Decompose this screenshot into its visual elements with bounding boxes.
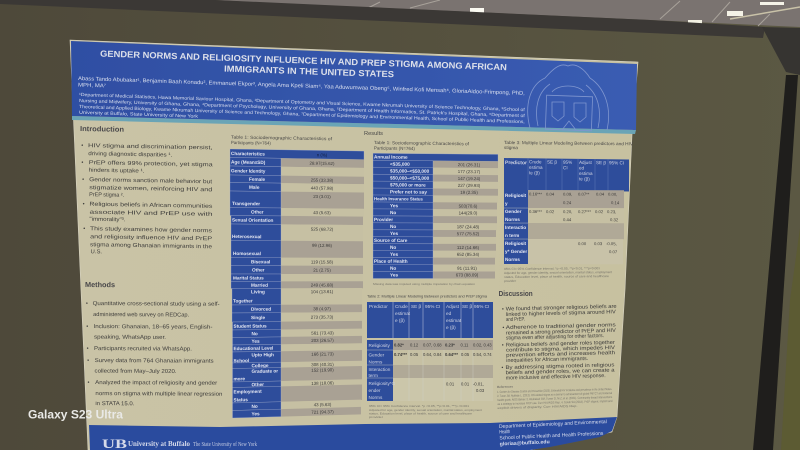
footer university name: University at Buffalo [128, 440, 190, 448]
table 1 continued note: Missing data was imputed using multiple imputation by chain equation [373, 282, 475, 286]
table 3 header row: estima [579, 171, 593, 176]
table 3 rows: 0.03 [594, 241, 603, 246]
discussion bullets: more inclusive and effective HIV response. [506, 373, 606, 382]
table 1: sociodemographic characteristics part one: Heterosexual [232, 234, 261, 239]
table 3 rows: 0.07** [578, 192, 590, 197]
table 1: sociodemographic characteristics part one: 721 (94.37) [311, 409, 334, 415]
table 2 rows: 0.54, 0.74 [473, 352, 492, 357]
table 3 rows: Norms [505, 217, 520, 222]
table 3 header row: CI [563, 165, 568, 170]
table 3 rows: 0.36*** [529, 209, 542, 214]
table 2 rows: 0.02, 0.43 [473, 342, 492, 348]
table 2 rows: Norms [368, 395, 383, 400]
table 2 footnote [369, 404, 482, 419]
introduction bullets: • [83, 202, 85, 208]
title: GENDER NORMS AND RELIGIOSITY INFLUENCE HIV AND PREP STIGMA AMONG AFRICAN [100, 49, 507, 72]
ceiling [215, 0, 800, 27]
table 3: predictors and HIV stigma [504, 158, 629, 264]
methods bullets: in STATA 15.0. [95, 401, 135, 407]
methods bullets: collected from May–July 2020. [95, 369, 177, 375]
table 3 header row: te (β) [529, 170, 540, 175]
table 1 continued title [374, 140, 470, 152]
table 1 continued: sociodemographic characteristics part two: 147 (19.24) [458, 176, 481, 181]
discussion bullets: remained a strong predictor of PrEP and HIV [506, 328, 616, 336]
table 1: sociodemographic characteristics part one: Sexual Orientation [232, 218, 274, 223]
table 3 rows: 0.27*** [578, 209, 591, 214]
introduction bullets [79, 143, 214, 257]
table 2 header row: Adjust [446, 304, 460, 309]
table 1 continued: sociodemographic characteristics part two: 177 (23.17) [458, 169, 481, 174]
introduction bullets: Religious beliefs in African communities [89, 202, 213, 210]
table 1: sociodemographic characteristics part one: No [252, 331, 258, 336]
footer contact details: gloriaa@buffalo.edu [500, 439, 550, 447]
table 3 header row [504, 158, 629, 192]
table 2 header row: e (β) [395, 318, 405, 323]
table 2 rows: 0.64*** [445, 352, 458, 357]
table 3 rows: Gender [505, 209, 522, 214]
table 2 rows: term [368, 373, 378, 378]
table 1 continued: sociodemographic characteristics part two: No [390, 224, 396, 229]
table 2 rows: Religiosity*G [368, 381, 396, 386]
table 1 continued: sociodemographic characteristics part two: 503(70.6) [459, 204, 478, 209]
table 2 rows: Gender [368, 352, 385, 358]
table 1 continued: sociodemographic characteristics part two: No [390, 266, 396, 271]
table 2 header row: estimat [395, 311, 411, 316]
table 1: sociodemographic characteristics part one: Married [251, 283, 268, 288]
table 1: sociodemographic characteristics part one: Living [251, 289, 265, 294]
methods bullets: • [86, 324, 88, 330]
table 1: sociodemographic characteristics part one: 21 (2.75) [313, 268, 331, 273]
references: 2. Turan JM, Nyblade L. (2013). HIV-related stigma as a barrier to achievement of global PMTCT and maternal [497, 391, 612, 398]
table 3 rows: 0.02 [595, 209, 604, 214]
table 1 continued: sociodemographic characteristics part two: 577 (75.52) [457, 231, 480, 236]
table 2 rows: 0.05 [410, 352, 419, 357]
table 1: sociodemographic characteristics part one: Status [234, 397, 248, 402]
table 2 header row: SE β [462, 304, 473, 309]
table 2 header row: 95% CI [474, 304, 489, 309]
references: explicit drivers of disparity. Curr HIV/AIDS Rep. [497, 404, 578, 410]
table 1: sociodemographic characteristics part one: No [252, 404, 258, 409]
table 3 rows: 0.09, [563, 192, 572, 197]
table 1: sociodemographic characteristics part one: Bisexual [251, 259, 270, 264]
table 1: sociodemographic characteristics part one: Single [251, 315, 265, 320]
table 2 footnote: 95% CI= 95% Confidence interval. *p <0.05, **p<0.01, ***p <0.001 [369, 404, 469, 408]
introduction bullets: PrEP stigma ². [89, 192, 125, 199]
references: health goals. AIDS Behav. 3. Abubakari GM, Turner D, Ni Z, et al. (2021). Community-based interventions [497, 395, 613, 402]
table 2 rows: 0.74*** [394, 352, 407, 357]
discussion bullets: • [502, 307, 504, 313]
methods bullets [85, 301, 223, 408]
table 2 header row: Crude [395, 304, 408, 309]
discussion bullets: and PrEP. [506, 317, 525, 323]
table 3 footnote [504, 266, 612, 283]
table 3 footnote: status, Education level, place of health, source of care and healthcare [504, 274, 609, 279]
table 1 continued title: Participants (N=764) [374, 145, 415, 151]
table 1: sociodemographic characteristics part one: Employment [234, 389, 262, 394]
UB logo [102, 436, 190, 450]
table 1: sociodemographic characteristics part one: 23 (3.01) [313, 194, 331, 199]
table 1: sociodemographic characteristics part one: 273 (35.73) [311, 315, 334, 320]
table 2 rows: Interaction [368, 367, 391, 372]
table 1: sociodemographic characteristics part one: 255 (33.38) [311, 178, 334, 183]
table 1 title: Table 1: Sociodemographic Characteristics of [231, 135, 333, 141]
table 2 rows: 0.03 [476, 388, 485, 393]
table 2: predictors and PrEP stigma [367, 302, 493, 401]
footer contact details: Department of Epidemiology and Environmental [499, 419, 607, 430]
display frame top bar [0, 0, 765, 38]
table 1 continued: sociodemographic characteristics part two: Annual Income [374, 155, 408, 160]
table 1 continued: sociodemographic characteristics part two: <$35,000 [390, 162, 410, 167]
table 3 rows: -0.05, [606, 241, 617, 246]
introduction bullets: "immorality"³. [89, 217, 126, 223]
discussion bullets [500, 304, 619, 382]
table 2 rows: 0.12 [410, 342, 419, 348]
discussion bullets: linked to higher levels of stigma around HIV [506, 309, 616, 318]
table 1 continued: sociodemographic characteristics part two: Yes [390, 252, 398, 257]
discussion section [498, 286, 619, 382]
heading: methods: Methods [85, 280, 115, 289]
table 1: sociodemographic characteristics part one: Divorced [251, 307, 271, 312]
header band [71, 41, 637, 134]
table 1 continued: sociodemographic characteristics part two: Yes [390, 203, 398, 208]
table 2 rows: Religiosity [368, 343, 391, 348]
table 1: sociodemographic characteristics part one: 99 (12.96) [312, 243, 333, 248]
table 2 header row: 95% CI [425, 304, 440, 309]
table 1: sociodemographic characteristics part one: Yes [252, 339, 260, 344]
table 1 continued: sociodemographic characteristics part two: 19 (2.35) [460, 190, 478, 195]
results heading: Results [364, 131, 383, 137]
table 1 continued: sociodemographic characteristics part two: 144(29.0) [459, 210, 478, 216]
methods section [84, 280, 223, 408]
table 3 header row: SE β [547, 160, 557, 165]
references [497, 382, 613, 410]
table 3 rows: 0.24 [563, 200, 572, 205]
methods bullets: • [87, 380, 90, 386]
discussion bullets: By addressing stigma rooted in religious [505, 362, 615, 371]
table 1: sociodemographic characteristics part one: 249 (45.68) [311, 283, 334, 288]
table 2 footnote: Adjusted for age, gender identity, sexual orientation, marital status, employment [369, 408, 482, 412]
table 1: sociodemographic characteristics part one: 28.97(15.62) [310, 161, 335, 166]
table 3 header row: SE β [596, 160, 606, 165]
table 1: sociodemographic characteristics part one: 308 (40.31) [311, 362, 334, 367]
table 1 continued: sociodemographic characteristics part two: Health Insurance Status [374, 196, 424, 201]
affiliations: University at Buffalo, State University of New York [79, 110, 199, 119]
table 3 rows: n term [505, 233, 519, 238]
discussion bullets: Religious beliefs and gender roles together [506, 340, 615, 348]
table 1: sociodemographic characteristics part one: Age (Mean±SD) [231, 160, 266, 165]
table 1: sociodemographic characteristics part one: Gender Identity [231, 168, 266, 174]
introduction bullets: stigma among Ghanaian immigrants in the [90, 242, 212, 250]
introduction section [78, 124, 215, 257]
discussion bullets: We found that stronger religious beliefs are [506, 304, 617, 312]
introduction bullets: U.S. [91, 249, 103, 255]
authors: MPH, MA⁷ [78, 83, 106, 89]
introduction bullets: • [82, 177, 84, 183]
table 1 continued: sociodemographic characteristics part two: Place of Health [374, 259, 408, 264]
table 3 rows: 0.14 [611, 200, 620, 205]
table 1 continued: sociodemographic characteristics part two: $75,000 or more [390, 182, 426, 188]
methods bullets: • [86, 301, 88, 307]
title: IMMIGRANTS IN THE UNITED STATES [224, 64, 394, 79]
display frame corner and post [753, 27, 800, 450]
table 3 header row: estima [529, 165, 543, 170]
table 1 continued: sociodemographic characteristics part two: Yes [390, 231, 398, 236]
methods bullets: administered web survey on REDCap. [93, 312, 190, 319]
table 2 rows: ender [368, 388, 381, 393]
table 3 footnote: 95% CI= 95% Confidence interval. *p <0.05, **p<0.01, ***p<0.001 [504, 266, 600, 271]
table 1: sociodemographic characteristics part one: Yes [252, 411, 260, 416]
table 1: sociodemographic characteristics part one: 443 (57.98) [311, 185, 334, 191]
table 3 rows: 0.04 [546, 192, 555, 197]
methods bullets: Analyzed the impact of religiosity and gender [95, 380, 217, 387]
introduction bullets: • [81, 160, 83, 166]
table 1: sociodemographic characteristics part one: 104 (13.61) [311, 289, 334, 294]
table 2 footnote: provider [369, 415, 383, 419]
footer contact details: Health [499, 429, 510, 435]
table 1: sociodemographic characteristics part one: 43 (5.63) [314, 402, 332, 407]
table 3 rows: 0.04 [596, 192, 605, 197]
table 3 rows: 0.23, [607, 209, 616, 214]
table 1 continued: sociodemographic characteristics part two [373, 153, 498, 278]
footer university subtitle: The State University of New York [193, 441, 257, 448]
table 2 rows [367, 340, 493, 401]
table 2 rows: 0.07, 0.68 [423, 342, 442, 348]
table 2 header row: ed [446, 311, 452, 316]
table 2 rows: 0.01 [446, 382, 455, 386]
table 1: sociodemographic characteristics part one: Graduate or [252, 368, 278, 374]
methods bullets: Survey data from 764 Ghanaian immigrants [95, 358, 214, 365]
table 3 header row: 95% CI [609, 160, 624, 165]
introduction bullets: stigmatize women, reinforcing HIV and [89, 185, 212, 193]
table 3 footnote: Adjusted for age, gender identity, sexual orientation, marital status, employment [504, 270, 612, 275]
methods bullets: norms on stigma with multiple linear regression [95, 391, 222, 398]
table 2 rows: Norms [368, 360, 383, 364]
authors: Abass Tando Abubakar¹, Benjamin Baah Konadu², Emmanuel Ekpor³, Angela Ama Kpeli Siam⁴, Yaa Aduwumwaa Obeng⁵, Winfred Kofi Mensah⁶, GloriaAidoo-Frimpong, PhD, [78, 76, 525, 97]
introduction bullets: This study examines how gender norms [90, 226, 212, 234]
discussion bullets: Adherence to traditional gender norms [506, 322, 616, 331]
table 1: sociodemographic characteristics part one: Together [233, 298, 253, 303]
table 3 rows: 0.44 [563, 217, 572, 222]
table 1: sociodemographic characteristics part one: School [234, 358, 249, 363]
table 1 title [231, 135, 333, 147]
discussion bullets: inequalities for African immigrants. [506, 356, 588, 364]
table 3 rows: y [505, 201, 508, 206]
table 1: sociodemographic characteristics part one: Other [251, 382, 264, 387]
introduction bullets: hinders its uptake ¹. [89, 168, 145, 175]
heading: discussion: Discussion [499, 289, 533, 298]
methods bullets: Inclusion: Ghanaian, 18–65 years, English- [93, 324, 213, 331]
table 1: sociodemographic characteristics part one: Characteristics [231, 151, 265, 157]
table 3 title: stigma [504, 145, 519, 150]
table 3 rows: Religiosit [505, 193, 527, 198]
table 2 title: Table 2: Multiple Linear Modeling Between predictors and PrEP stigma [367, 294, 488, 298]
table 1: sociodemographic characteristics part one: n (%) [317, 152, 328, 158]
references: as a strategy to increase PrEP use. Curr HIV/AIDS Rep. 4. Golub SA (2018). PrEP stigma: implicit and [497, 399, 613, 406]
table 1 continued: sociodemographic characteristics part two: 201 (26.31) [458, 162, 481, 167]
introduction bullets: • [81, 143, 83, 149]
table 1 continued: sociodemographic characteristics part two: 227 (29.93) [458, 183, 481, 188]
table 1 continued: sociodemographic characteristics part two: 673 (88.09) [456, 273, 479, 278]
table 1: sociodemographic characteristics part one: Student Status [234, 323, 267, 329]
table 3 rows: 0.20, [563, 209, 572, 214]
table 3 title [504, 140, 633, 151]
table 2 header row: e (β) [446, 325, 456, 330]
table 1 continued: sociodemographic characteristics part two: 652 (85.34) [457, 252, 480, 257]
table 1 continued: sociodemographic characteristics part two: Source of Care [374, 238, 408, 243]
table 1: sociodemographic characteristics part one: Transgender [232, 201, 260, 206]
table 1 continued: sociodemographic characteristics part two: 187 (24.48) [457, 224, 480, 229]
introduction bullets: associate HIV and PrEP use with [90, 210, 213, 218]
table 1: sociodemographic characteristics part one: 203 (26.57) [311, 338, 334, 343]
table 3 rows: 0.00, [608, 192, 617, 197]
table 1 continued: sociodemographic characteristics part two: No [390, 245, 396, 250]
table 1: sociodemographic characteristics part one: Other [252, 268, 265, 273]
table 3 rows: 0.16*** [529, 192, 542, 197]
affiliations: Nursing and Midwifery, University of Ghana, Ghana, ⁴Department of Psychology, University of Ghana, Ghana, ⁵Department of Health Informatics, St. Patrick's Hospital, Ghana, ⁶Department of [79, 98, 526, 118]
table 1: sociodemographic characteristics part one: Upto High [252, 352, 274, 358]
table 1 title: Participants (N=764) [231, 140, 271, 146]
footer band [89, 417, 617, 450]
table 3 rows: Religiosit [505, 241, 527, 246]
table 1: sociodemographic characteristics part one: 166 (21.73) [311, 351, 334, 357]
affiliations: Theoretical and Applied Biology, Kwame Nkrumah University of Science and Technology, Ghana, ⁷Department of Epidemiology and Environmental Health, School of Public Health and Professions, [79, 104, 525, 124]
table 1: sociodemographic characteristics part one: more [234, 376, 245, 381]
introduction bullets: Gender norms sanction male behavior but [89, 177, 213, 185]
table 1: sociodemographic characteristics part one: 525 (68.72) [311, 227, 334, 232]
affiliations [79, 92, 526, 124]
table 3 header row: 95% [563, 160, 572, 165]
table 3 rows [504, 190, 624, 264]
discussion bullets: contribute to stigma, which impedes HIV [506, 345, 616, 354]
methods bullets: Participants recruited via WhatsApp. [94, 346, 192, 353]
introduction bullets: • [83, 226, 85, 232]
affiliations: ¹Department of Medical Statistics, Hawa Memorial Saviour Hospital, Ghana, ²Department of Optometry and Visual Science, Kwame Nkrumah University of Science Technology, Ghana, ³School of [79, 92, 526, 112]
introduction bullets: HIV stigma and discrimination persist, [88, 143, 213, 151]
table 1: sociodemographic characteristics part one: College [252, 363, 269, 368]
discussion bullets: beliefs and gender roles, we can create a [505, 368, 615, 376]
references: 1. Centers for Disease Control and Prevention (2020). Estimated HIV incidence and prevalence in the United States. [497, 387, 612, 394]
table 3 rows: 0.07 [609, 249, 618, 254]
table 1 continued: sociodemographic characteristics part two: $35,000–<$50,000 [390, 169, 430, 174]
discussion bullets: • [502, 343, 504, 349]
introduction bullets: PrEP offers 99% protection, yet stigma [89, 160, 214, 168]
introduction bullets: driving diagnostic disparities ¹. [88, 151, 173, 159]
table 3 rows: y* Gender [505, 249, 527, 254]
table 1: sociodemographic characteristics part one: Female [249, 177, 266, 182]
table 1 continued: sociodemographic characteristics part two: Yes [390, 273, 398, 278]
table 3 header row: Adjust [579, 160, 592, 165]
table 2 rows: 0.64, 0.84 [423, 352, 442, 357]
table 1: sociodemographic characteristics part one: Marital Status [233, 276, 264, 280]
table 1 continued: sociodemographic characteristics part two: No [390, 210, 396, 215]
table 3 rows: Norms [505, 257, 520, 262]
table 1: sociodemographic characteristics part one: 138 (18.06) [311, 380, 334, 386]
poster sheet [70, 40, 638, 450]
table 3 rows: Interactio [505, 225, 526, 230]
table 1: sociodemographic characteristics part one: Homosexual [233, 251, 261, 256]
discussion bullets: stigma even after adjusting for other factors. [506, 333, 604, 341]
table 2 header row: SE β [411, 304, 422, 309]
table 2 header row: estimat [446, 318, 462, 323]
discussion bullets: prevention efforts and increases health [506, 350, 615, 359]
table 1: sociodemographic characteristics part one: 38 (4.97) [313, 306, 331, 311]
table 3 rows: 0.32 [610, 217, 619, 222]
table 1: sociodemographic characteristics part one: 119 (15.58) [311, 260, 334, 265]
table 1 continued: sociodemographic characteristics part two: $50,000–<$75,000 [390, 176, 430, 181]
camera watermark: Galaxy S23 Ultra [28, 408, 123, 422]
table 3 header row: te (β) [579, 176, 590, 182]
table 1 continued: sociodemographic characteristics part two: Prefer not to say [390, 189, 427, 195]
table 1 continued: sociodemographic characteristics part two: 91 (11.91) [457, 266, 477, 271]
table 1: sociodemographic characteristics part one: 152 (19.90) [311, 367, 334, 373]
table 1 continued: sociodemographic characteristics part two: 112 (14.66) [457, 245, 480, 250]
table 3 footnote: provider [504, 279, 516, 283]
table 3 header row: ed [579, 165, 585, 170]
table 2 footnote: status, Education level, place of health, source of care and healthcare [369, 412, 472, 416]
discussion bullets: • [501, 365, 503, 371]
table 2 header row: Predictor [369, 304, 388, 309]
table 3 header row: Crude [529, 159, 542, 164]
methods bullets: • [87, 346, 89, 352]
introduction bullets: and religiosity influence HIV and PrEP [90, 234, 213, 242]
methods bullets: speaking, WhatsApp user. [94, 335, 167, 341]
table 2 rows: -0.01, [473, 382, 484, 386]
table 3 rows: 0.02 [546, 209, 555, 214]
references: References [497, 385, 513, 389]
table 2 rows: 0.11 [460, 342, 469, 348]
discussion bullets: • [502, 325, 505, 331]
table 2 rows: 0.23* [445, 342, 455, 348]
table 1 continued: sociodemographic characteristics part two: Provider [374, 217, 393, 222]
table 1: sociodemographic characteristics part one: 43 (5.63) [313, 210, 331, 215]
methods bullets: • [87, 358, 89, 364]
table 3 header row: Predictor [505, 160, 527, 166]
table 2 rows: 0.05 [461, 352, 470, 357]
table 1: sociodemographic characteristics part one: Other [251, 210, 264, 215]
table 2 header row [367, 302, 493, 338]
table 1 continued title: Table 1: Sociodemographic Characteristics of [374, 140, 470, 146]
methods bullets: Quantitative cross-sectional study using a self- [93, 301, 220, 308]
table 3 rows: 0.00 [578, 241, 587, 246]
table 1: sociodemographic characteristics part one [230, 149, 364, 418]
table 1: sociodemographic characteristics part one: Educational Level [234, 346, 273, 351]
table 3 title: Table 3: Multiple Linear Modeling Between predictors and HIV [504, 140, 633, 146]
table 1: sociodemographic characteristics part one: Male [249, 185, 260, 190]
table 2 rows: 0.82* [394, 342, 404, 348]
table 1: sociodemographic characteristics part one: 561 (73.43) [311, 330, 334, 336]
footer contact details [499, 419, 608, 447]
footer contact details: School of Public Health and Health Professions [499, 431, 604, 441]
table 2 rows: 0.01 [461, 382, 470, 386]
icon: university seal [528, 65, 609, 131]
heading: introduction: Introduction [80, 124, 124, 134]
